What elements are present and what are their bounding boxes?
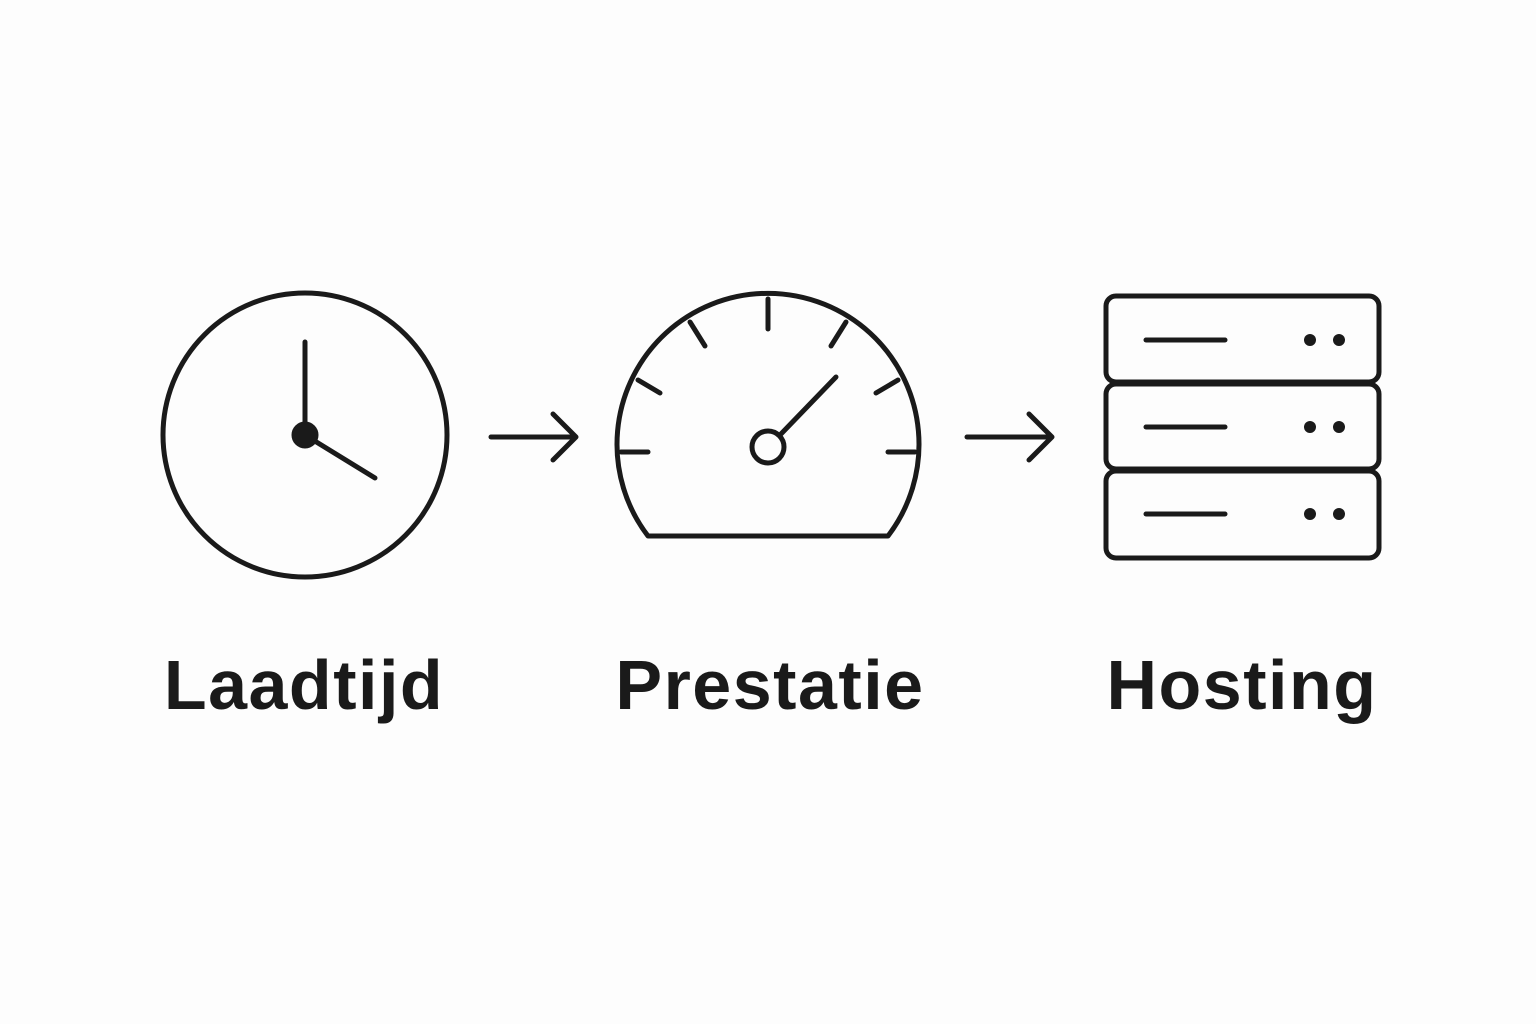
arrow 1	[491, 414, 576, 460]
label: Prestatie: Prestatie	[615, 646, 925, 724]
icon: speedometer	[617, 293, 919, 536]
icon: clock	[163, 293, 447, 577]
label: Laadtijd: Laadtijd	[164, 646, 444, 724]
label: Hosting: Hosting	[1106, 646, 1378, 724]
icon: server stack	[1106, 296, 1379, 558]
arrow 2	[967, 414, 1052, 460]
